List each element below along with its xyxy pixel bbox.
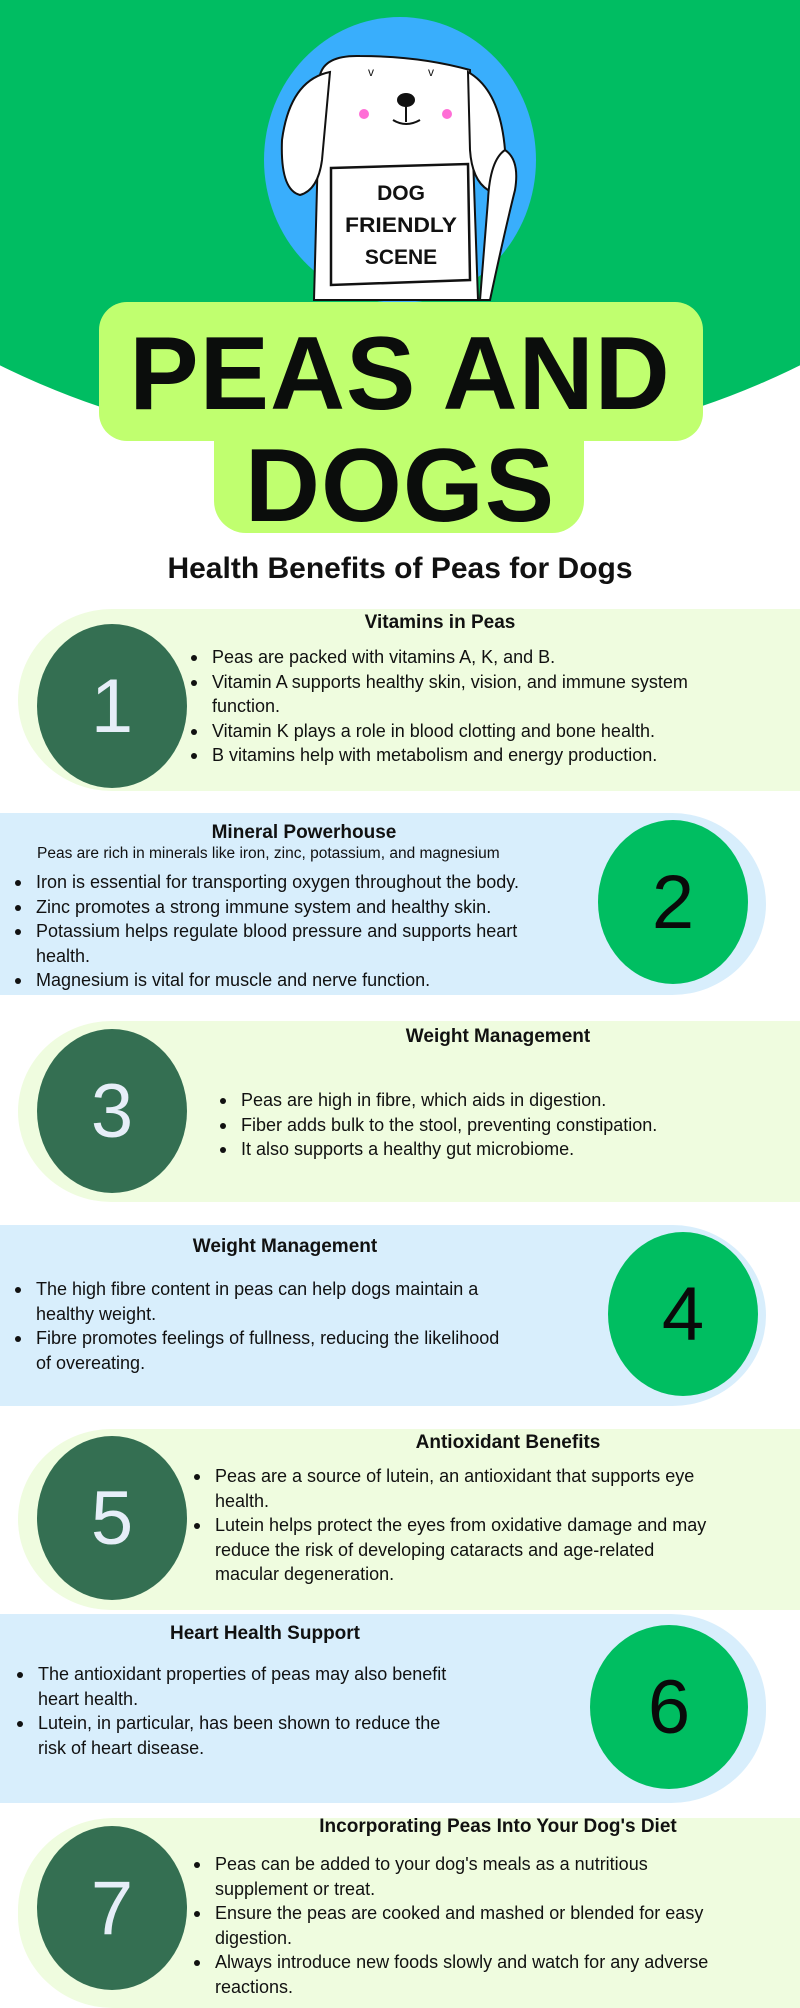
text: health. bbox=[36, 946, 90, 966]
text: Fiber adds bulk to the stool, preventing constipation. bbox=[241, 1114, 657, 1134]
text: digestion. bbox=[215, 1928, 292, 1948]
text: Weight Management bbox=[406, 1026, 590, 1047]
text: supplement or treat. bbox=[215, 1878, 375, 1898]
text: 2 bbox=[652, 860, 694, 944]
panel 6: heart bbox=[0, 1614, 766, 1803]
text: B vitamins help with metabolism and energy production. bbox=[212, 745, 657, 765]
text: Ensure the peas are cooked and mashed or blended for easy bbox=[215, 1903, 703, 1923]
text: 5 bbox=[91, 1476, 133, 1560]
text: risk of heart disease. bbox=[38, 1738, 204, 1758]
panel 3: fibre bbox=[18, 1021, 800, 1202]
text: Always introduce new foods slowly and watch for any adverse bbox=[215, 1952, 708, 1972]
text: Mineral Powerhouse bbox=[212, 822, 396, 843]
text: of overeating. bbox=[36, 1352, 145, 1372]
text: Peas can be added to your dog's meals as a nutritious bbox=[215, 1854, 648, 1874]
text: function. bbox=[212, 696, 280, 716]
text: Peas are packed with vitamins A, K, and B. bbox=[212, 647, 555, 667]
title bbox=[129, 316, 671, 544]
text: Iron is essential for transporting oxygen throughout the body. bbox=[36, 872, 519, 892]
text: 6 bbox=[648, 1664, 690, 1750]
text: 7 bbox=[91, 1866, 133, 1950]
title: PEAS AND bbox=[129, 316, 671, 432]
text: 3 bbox=[91, 1068, 133, 1154]
panel 1: vitamins bbox=[18, 609, 800, 791]
text: Vitamin A supports healthy skin, vision, and immune system bbox=[212, 672, 688, 692]
panel 5: antioxidants bbox=[18, 1429, 800, 1610]
panel 7: incorporating bbox=[18, 1818, 800, 2008]
text: Vitamins in Peas bbox=[365, 612, 515, 633]
text: Peas are a source of lutein, an antioxidant that supports eye bbox=[215, 1466, 694, 1486]
text: healthy weight. bbox=[36, 1304, 156, 1324]
text: Vitamin K plays a role in blood clotting and bone health. bbox=[212, 720, 655, 740]
text: Lutein helps protect the eyes from oxidative damage and may bbox=[215, 1515, 706, 1535]
text: Peas are rich in minerals like iron, zinc, potassium, and magnesium bbox=[37, 845, 500, 862]
text: It also supports a healthy gut microbiome. bbox=[241, 1139, 574, 1159]
icon: dog logo: DOG bbox=[377, 182, 425, 205]
text: The antioxidant properties of peas may also benefit bbox=[38, 1664, 446, 1684]
title box bbox=[99, 302, 703, 441]
text: Fibre promotes feelings of fullness, reducing the likelihood bbox=[36, 1328, 499, 1348]
text: reactions. bbox=[215, 1976, 293, 1996]
icon: dog logo: v bbox=[428, 65, 434, 79]
title: DOGS bbox=[245, 428, 555, 544]
icon: dog logo: SCENE bbox=[365, 246, 437, 269]
text: reduce the risk of developing cataracts and age-related bbox=[215, 1540, 654, 1560]
icon: dog logo bbox=[264, 17, 536, 302]
text: Magnesium is vital for muscle and nerve function. bbox=[36, 970, 430, 990]
text: Weight Management bbox=[193, 1236, 377, 1257]
text: Incorporating Peas Into Your Dog's Diet bbox=[319, 1816, 677, 1837]
panel 2: minerals bbox=[0, 813, 766, 995]
text: 4 bbox=[662, 1272, 704, 1356]
text: macular degeneration. bbox=[215, 1564, 394, 1584]
panel 4: weight bbox=[0, 1225, 766, 1406]
text: 1 bbox=[91, 664, 133, 748]
text: health. bbox=[215, 1490, 269, 1510]
text: Potassium helps regulate blood pressure and supports heart bbox=[36, 921, 517, 941]
text: Antioxidant Benefits bbox=[416, 1432, 600, 1453]
subtitle: Health Benefits of Peas for Dogs bbox=[167, 552, 633, 585]
icon: dog logo: FRIENDLY bbox=[345, 214, 457, 237]
icon: dog logo: v bbox=[368, 65, 374, 79]
text: Heart Health Support bbox=[170, 1623, 360, 1644]
text: The high fibre content in peas can help dogs maintain a bbox=[36, 1279, 478, 1299]
text: Zinc promotes a strong immune system and healthy skin. bbox=[36, 896, 491, 916]
header green background bbox=[0, 0, 800, 455]
text: Peas are high in fibre, which aids in digestion. bbox=[241, 1090, 606, 1110]
text: Lutein, in particular, has been shown to reduce the bbox=[38, 1713, 440, 1733]
text: heart health. bbox=[38, 1688, 138, 1708]
